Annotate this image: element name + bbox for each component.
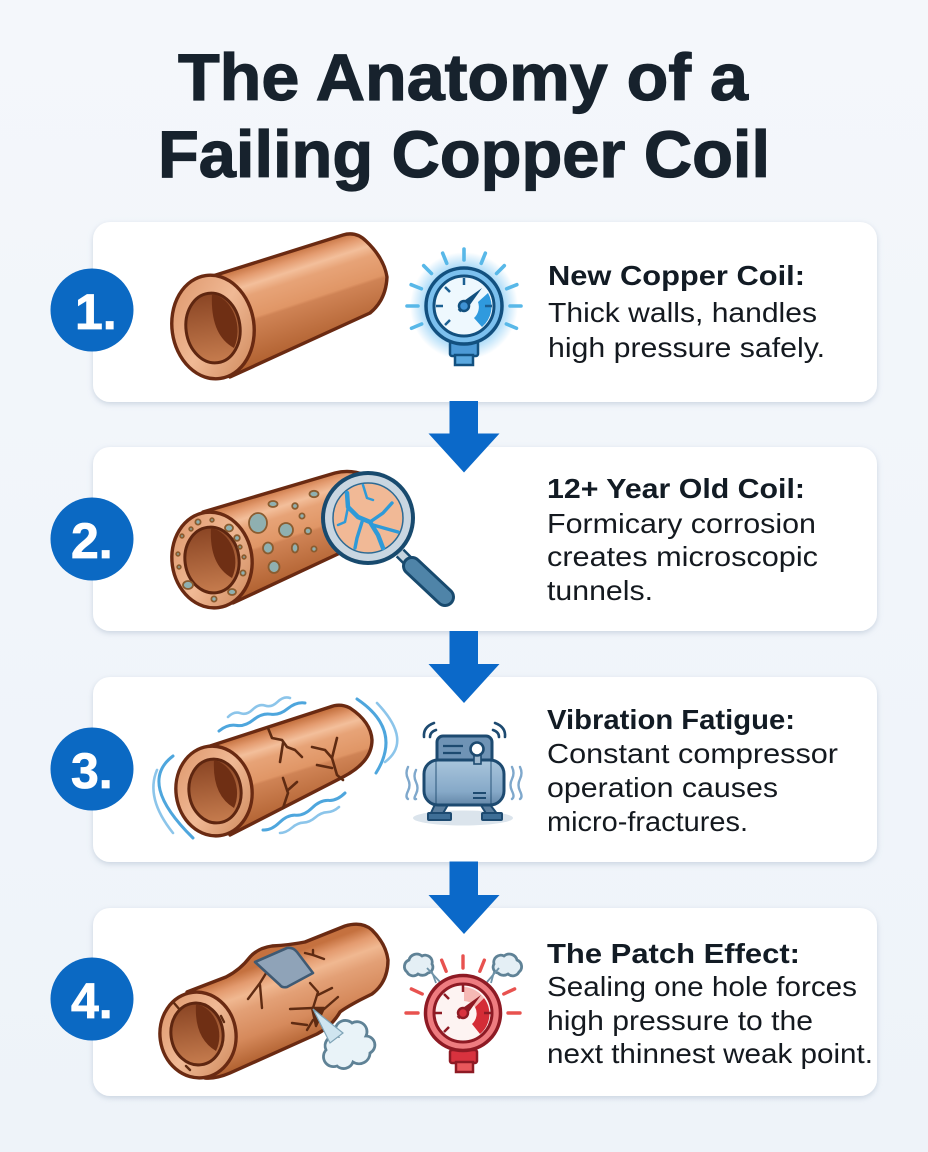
text: vibration fatigue xyxy=(547,704,838,837)
text: new copper coil: Thick walls, handles xyxy=(548,297,817,328)
illustration: corroded tube xyxy=(166,471,445,613)
text: old coil: tunnels. xyxy=(547,575,653,606)
metal patch xyxy=(255,948,313,987)
panel: step 4 patch effect xyxy=(50,908,877,1096)
card 3 xyxy=(93,677,877,862)
text: old coil: creates microscopic xyxy=(547,541,818,572)
card 4 xyxy=(93,908,877,1096)
text: old coil xyxy=(547,473,818,606)
magnifying glass xyxy=(321,471,445,597)
badge 3 xyxy=(50,728,134,810)
illustration: new copper tube xyxy=(165,234,387,384)
arrow: step 3 to 4 xyxy=(428,862,500,934)
text: patch effect: Sealing one hole forces xyxy=(547,971,857,1002)
arrow: step 1 to 2 xyxy=(428,401,500,472)
badge 3: 3. xyxy=(71,743,113,799)
title xyxy=(158,40,770,191)
cracks xyxy=(268,728,343,808)
text: vibration fatigue: Vibration Fatigue: xyxy=(547,704,795,735)
illustration: patched leaking tube xyxy=(154,924,388,1083)
badge 4: 4. xyxy=(71,973,113,1029)
text: new copper coil xyxy=(548,260,825,363)
icon: healthy pressure gauge xyxy=(407,249,521,365)
text: vibration fatigue: Constant compressor xyxy=(547,738,838,769)
text: new copper coil: New Copper Coil: xyxy=(548,260,805,291)
panel: step 2 old coil xyxy=(50,447,877,631)
card 1 xyxy=(93,222,877,402)
badge 4 xyxy=(50,958,134,1040)
cracks xyxy=(174,950,338,1070)
panel: step 1 new copper coil xyxy=(50,222,877,402)
badge 1: 1. xyxy=(75,284,117,340)
badge 2: 2. xyxy=(71,513,113,569)
arrow: step 2 to 3 xyxy=(428,631,500,703)
card 2 xyxy=(93,447,877,631)
text: patch effect xyxy=(547,938,873,1069)
text: vibration fatigue: micro-fractures. xyxy=(547,806,748,837)
badge 2 xyxy=(50,498,134,580)
badge 1 xyxy=(50,268,134,352)
corrosion pits xyxy=(176,491,318,602)
icon: overpressure gauge xyxy=(404,954,522,1072)
title: The Anatomy of a xyxy=(178,40,749,114)
vibration waves xyxy=(153,697,397,838)
icon: compressor xyxy=(406,723,522,826)
text: patch effect: next thinnest weak point. xyxy=(547,1038,873,1069)
text: old coil: Formicary corrosion xyxy=(547,508,816,539)
text: new copper coil: high pressure safely. xyxy=(548,332,825,363)
steam leak xyxy=(313,1009,375,1069)
text: patch effect: The Patch Effect: xyxy=(547,938,800,969)
text: vibration fatigue: operation causes xyxy=(547,772,778,803)
panel: step 3 vibration fatigue xyxy=(50,401,877,1096)
text: patch effect: high pressure to the xyxy=(547,1005,813,1036)
illustration: cracked vibrating tube xyxy=(153,697,838,841)
text: old coil: 12+ Year Old Coil: xyxy=(547,473,805,504)
title: Failing Copper Coil xyxy=(158,117,770,191)
